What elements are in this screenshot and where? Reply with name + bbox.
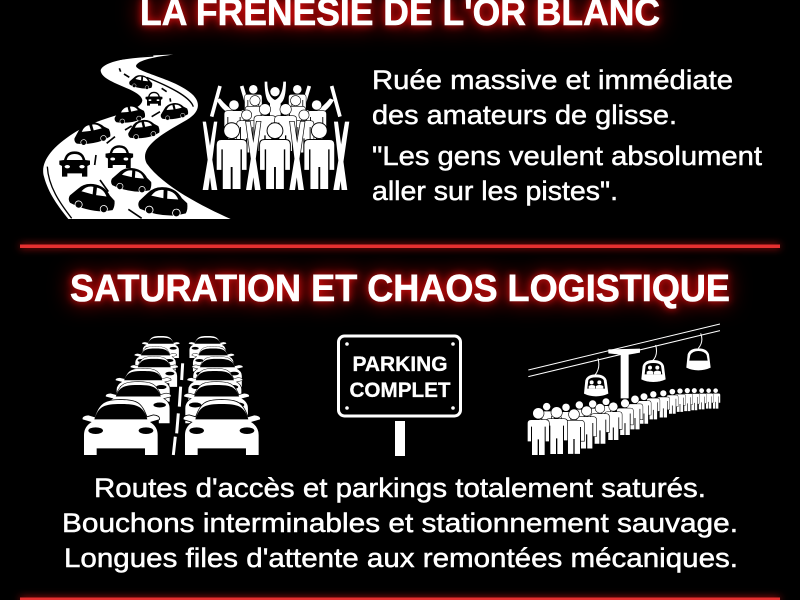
icon: parking complet sign: COMPLET [350,379,451,402]
divider [20,598,780,600]
text block: routes et parkings saturés: Longues files d'attente aux remontées mécaniques. [64,543,738,573]
icon: parking complet sign: PARKING [352,353,448,376]
text block: ruée massive: des amateurs de glisse. [372,100,677,130]
icon: parking complet sign [338,336,460,456]
icon: highway full of cars [43,55,231,219]
heading: saturation et chaos logistique: SATURATION ET CHAOS LOGISTIQUE [70,268,730,310]
text block: ruée massive: "Les gens veulent absolument [372,141,763,171]
text block: ruée massive: Ruée massive et immédiate [372,65,733,95]
text block: routes et parkings saturés: Routes d'accès et parkings totalement saturés. [94,473,706,503]
text block: ruée massive [372,65,763,206]
text block: routes et parkings saturés [62,473,738,573]
text block: routes et parkings saturés: Bouchons interminables et stationnement sauvage. [62,508,738,538]
icon: ski lift queue [528,324,720,455]
icon: crowd of skiers [203,82,349,190]
text block: ruée massive: aller sur les pistes". [372,176,618,206]
divider [20,244,780,248]
icon: traffic jam [83,336,260,455]
